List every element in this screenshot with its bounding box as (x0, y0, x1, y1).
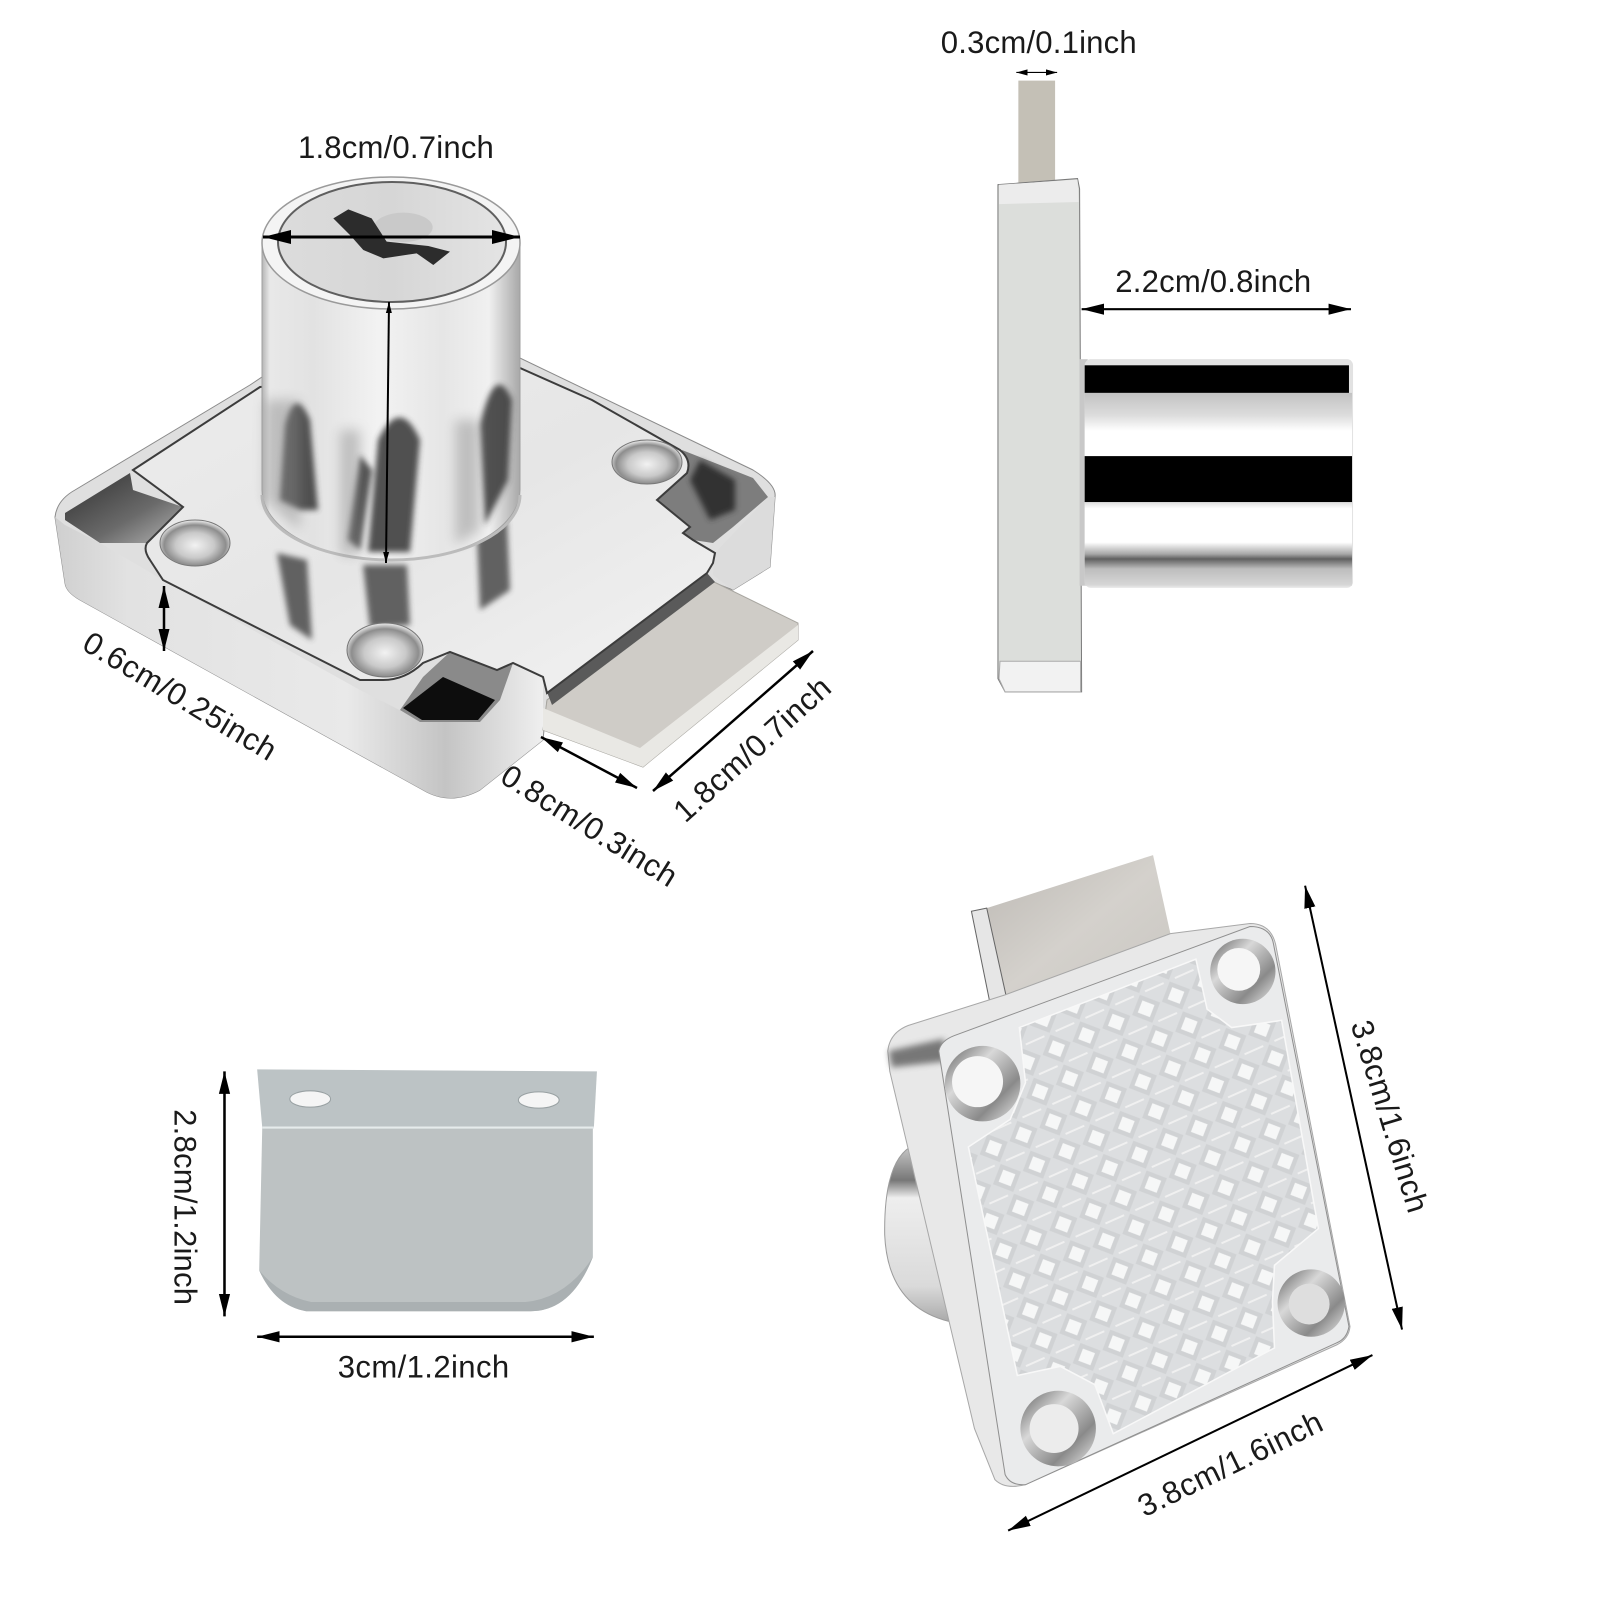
back view body wall (888, 923, 1350, 1486)
lock bolt top (543, 580, 798, 767)
lock cavity right (657, 450, 768, 543)
bracket top flange (257, 1069, 597, 1128)
back view face (939, 927, 1349, 1485)
hole center (952, 1056, 1003, 1107)
bracket slot left (290, 1091, 331, 1107)
label: back view width: 3.8cm/1.6inch (1132, 1404, 1328, 1524)
hole center (1217, 948, 1260, 991)
side view bolt (1018, 81, 1055, 183)
side view plate bottom band (999, 661, 1081, 692)
bracket body (259, 1128, 593, 1311)
arrow: 1.8cm cylinder width (263, 236, 520, 238)
back view texture (968, 959, 1318, 1434)
lock cavity left (65, 473, 183, 543)
back view hole top right (1210, 939, 1276, 1004)
screw hole rear right (612, 440, 682, 484)
cylinder top rim (262, 177, 520, 309)
cylinder soft shading (265, 400, 480, 555)
key slot (333, 209, 450, 265)
arrow: 1.8cm bolt (653, 651, 813, 791)
hole ring (1210, 939, 1276, 1004)
label: bolt width: 1.8cm/0.7inch (667, 670, 838, 829)
lock front side wall (55, 517, 543, 798)
annotations for side view (941, 25, 1351, 309)
lock cavity right shadow (690, 460, 735, 520)
label: cylinder length: 2.2cm/0.8inch (1115, 264, 1311, 299)
arrow: back view height (1305, 886, 1402, 1330)
screw hole front (347, 623, 423, 677)
lock: back view (885, 855, 1435, 1531)
arrow: bracket height (223, 1071, 226, 1316)
key slot opening (333, 209, 450, 265)
hole center (1289, 1284, 1330, 1324)
lock cover plate (133, 368, 715, 693)
black stripe lower (1085, 456, 1352, 502)
lock: angled top view (55, 177, 798, 798)
cylinder top face (278, 182, 506, 302)
arrow: 0.8cm bolt (541, 737, 637, 788)
bracket bottom edge (259, 1257, 593, 1311)
cylinder lower band (1085, 502, 1352, 586)
back view hole bottom right (1278, 1269, 1345, 1337)
lock cavity front dark (403, 677, 495, 720)
hole ring (945, 1046, 1020, 1121)
bracket (167, 1069, 597, 1385)
bracket crease (262, 1127, 594, 1129)
arrow: cylinder height (386, 302, 389, 563)
back view bolt face (987, 855, 1170, 1005)
key slot pad (374, 213, 433, 242)
label: bolt length: 0.8cm/0.3inch (495, 758, 684, 894)
hole ring (1278, 1269, 1345, 1337)
arrow: bracket width (257, 1335, 594, 1338)
lock right side wall (713, 497, 775, 590)
side view plate top band (999, 180, 1079, 204)
label: bracket width: 3cm/1.2inch (338, 1350, 509, 1385)
arrow: 0.6cm thickness (163, 586, 165, 651)
back view bolt side (971, 908, 1008, 1012)
cylinder dark reflections (280, 385, 512, 552)
label: bracket height: 2.8cm/1.2inch (167, 1109, 202, 1305)
cylinder upper band (1085, 393, 1352, 456)
label: cylinder width: 1.8cm/0.7inch (298, 130, 494, 165)
labels for top view (77, 130, 838, 894)
hole center (1030, 1404, 1079, 1453)
arrow: 2.2cm cylinder (1082, 308, 1351, 310)
back view hole bottom left (1020, 1391, 1096, 1466)
lock cavity front (400, 652, 513, 722)
label: thickness: 0.6cm/0.25inch (77, 625, 283, 768)
lock bolt edge (543, 625, 798, 767)
screw hole front left (160, 520, 230, 566)
hole ring (1020, 1391, 1096, 1466)
back view wall dark streak (889, 1039, 947, 1067)
side view cylinder (1085, 359, 1353, 588)
lock bolt groove (547, 573, 715, 705)
bracket slot right (518, 1092, 559, 1108)
label: back view height: 3.8cm/1.6inch (1344, 1016, 1435, 1217)
back view hole top left (945, 1046, 1020, 1121)
back view cylinder (885, 1145, 949, 1321)
key cylinder body (262, 245, 520, 560)
cylinder base step (262, 495, 520, 560)
lock: side view (998, 81, 1353, 692)
arrow: 0.3cm bolt (1016, 71, 1057, 73)
side view collar (1080, 359, 1088, 586)
side view plate (998, 179, 1082, 692)
arrow: back view width (1008, 1355, 1372, 1531)
lock body outer (55, 358, 775, 798)
label: bolt thickness: 0.3cm/0.1inch (941, 25, 1137, 60)
plate reflection streaks (277, 520, 510, 640)
black stripe upper (1085, 365, 1349, 393)
